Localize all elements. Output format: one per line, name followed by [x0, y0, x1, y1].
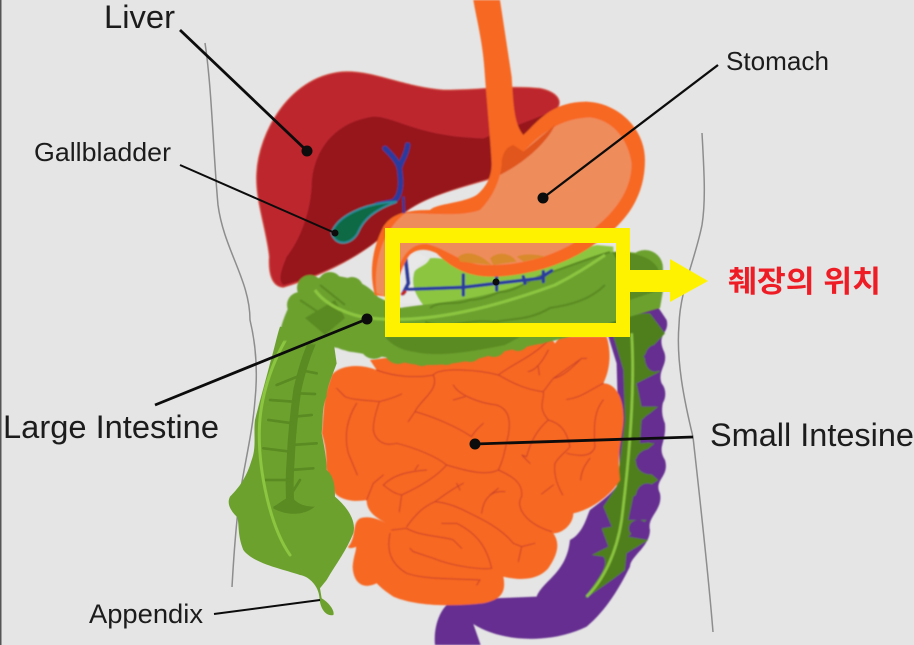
organ: transverse colon [278, 250, 665, 366]
leader: large intestine [155, 314, 372, 405]
label: Large Intestine: Large Intestine [3, 409, 219, 445]
label: Liver: Liver [104, 0, 175, 35]
leader: appendix [214, 600, 320, 614]
ascending colon dark stem [290, 337, 315, 507]
label: Small Intesine: Small Intesine [710, 417, 914, 453]
organ: small intestine [322, 337, 624, 605]
organ: pancreatic duct [402, 253, 552, 295]
organ: gallbladder [332, 202, 397, 243]
yellow highlight box [385, 228, 630, 337]
label: pancreas location (Korean): 췌장의 위치 [728, 266, 881, 299]
organ: liver [257, 72, 559, 287]
leader: pancreas [492, 278, 500, 286]
label: Stomach: Stomach [726, 46, 829, 76]
small intestine folds [337, 340, 603, 585]
organ: esophagus and stomach [372, 0, 645, 297]
yellow arrow [630, 259, 708, 302]
body outline [205, 43, 713, 632]
leader: small intestine [470, 437, 693, 450]
organ: ascending colon and cecum [229, 327, 354, 615]
leader: gallbladder [180, 165, 338, 236]
label: Gallbladder: Gallbladder [34, 137, 171, 167]
colon dark band [385, 337, 520, 354]
label: Appendix: Appendix [89, 599, 204, 629]
leader: stomach [538, 65, 718, 204]
leader lines [155, 30, 718, 614]
organ: pancreas [400, 245, 613, 310]
organ: bile duct [332, 145, 408, 243]
leader: liver [180, 30, 312, 156]
colon lobes [287, 250, 663, 366]
organ: descending colon [585, 313, 665, 598]
organ: sigmoid colon purple [435, 300, 667, 645]
anatomy illustration [322, 300, 667, 645]
